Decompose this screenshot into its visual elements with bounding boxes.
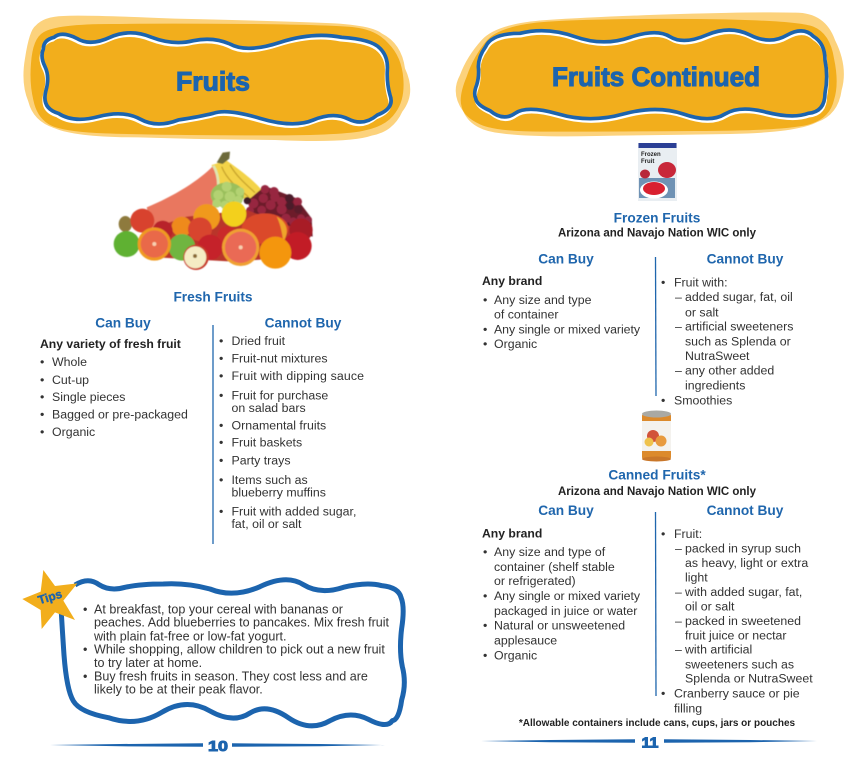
icon: frozen fruit bag: Frozen xyxy=(641,152,661,158)
list: cannot buy canned: – xyxy=(675,585,682,599)
icon: frozen fruit bag xyxy=(638,143,677,201)
list: can buy fresh: • xyxy=(40,355,44,369)
list: cannot buy fresh: • xyxy=(219,334,223,348)
subheading: canned eligibility: Arizona and Navajo Nation WIC only xyxy=(558,486,757,498)
icon: frozen fruit bag: Fruit xyxy=(641,159,654,165)
list: cannot buy frozen: – xyxy=(675,320,682,334)
list: can buy fresh: • xyxy=(40,408,44,422)
list: cannot buy canned: sweeteners such as xyxy=(685,657,794,671)
list: can buy fresh: Any variety of fresh fruit xyxy=(40,337,181,351)
list: can buy canned: Natural or unsweetened xyxy=(494,619,625,633)
list: cannot buy canned: oil or salt xyxy=(685,599,735,613)
page number: 11: 11 xyxy=(642,734,658,752)
list: cannot buy fresh: • xyxy=(219,369,223,383)
list: can buy frozen: • xyxy=(483,337,487,351)
list: can buy frozen: of container xyxy=(494,307,559,321)
list: cannot buy canned: – xyxy=(675,643,682,657)
list: cannot buy frozen: Fruit with: xyxy=(674,275,728,289)
list: can buy fresh: Whole xyxy=(52,355,87,369)
list: can buy canned: packaged in juice or water xyxy=(494,604,637,618)
list: cannot buy fresh: • xyxy=(219,418,223,432)
list: can buy canned: applesauce xyxy=(494,634,557,648)
list: cannot buy canned: packed in sweetened xyxy=(685,614,801,628)
list: cannot buy frozen: artificial sweeteners xyxy=(685,320,793,334)
heading: Frozen Fruits: Frozen Fruits xyxy=(614,211,701,226)
list: can buy canned: or refrigerated) xyxy=(494,574,576,588)
list: cannot buy fresh: Party trays xyxy=(232,453,290,467)
list: can buy frozen: Any size and type xyxy=(494,293,592,307)
list: cannot buy fresh: Dried fruit xyxy=(232,334,286,348)
list: cannot buy canned: with artificial xyxy=(684,643,752,657)
list: can buy canned: container (shelf stable xyxy=(494,560,615,574)
list: cannot buy fresh: • xyxy=(219,352,223,366)
list: cannot buy canned: • xyxy=(661,527,665,541)
list: can buy canned xyxy=(482,526,641,662)
list: cannot buy fresh: Fruit with dipping sauce xyxy=(232,369,364,383)
list: can buy canned: • xyxy=(483,589,487,603)
text: tips list xyxy=(83,602,390,697)
panel: page 11 xyxy=(456,12,844,752)
list: cannot buy canned: as heavy, light or extra xyxy=(685,556,808,570)
list: can buy fresh: Cut-up xyxy=(52,373,89,387)
panel: tips xyxy=(22,570,404,726)
list: can buy fresh: Organic xyxy=(52,425,95,439)
text: tips list: with plain fat-free or low-fat yogurt. xyxy=(93,629,286,643)
heading: Fresh Fruits: Fresh Fruits xyxy=(173,290,253,304)
list: cannot buy frozen: added sugar, fat, oil xyxy=(685,290,793,304)
list: can buy fresh: Single pieces xyxy=(52,390,125,404)
list: cannot buy canned: Splenda or NutraSweet xyxy=(685,672,813,686)
page number: 10: 10 xyxy=(208,738,228,755)
list: cannot buy fresh: Fruit-nut mixtures xyxy=(232,352,328,366)
list: cannot buy fresh: Fruit baskets xyxy=(232,436,302,450)
list: cannot buy fresh: • xyxy=(219,436,223,450)
list: can buy canned: • xyxy=(483,545,487,559)
list: can buy frozen xyxy=(482,274,641,351)
list: cannot buy fresh: Fruit with added sugar, xyxy=(232,505,356,519)
list: cannot buy canned xyxy=(661,527,813,715)
list: can buy fresh: Bagged or pre-packaged xyxy=(52,408,188,422)
list: cannot buy frozen: • xyxy=(661,393,665,407)
list: cannot buy fresh: • xyxy=(219,453,223,467)
list: cannot buy frozen: ingredients xyxy=(685,379,745,393)
heading: Cannot Buy: Cannot Buy xyxy=(265,316,342,331)
list: cannot buy fresh xyxy=(219,334,364,531)
text: tips list: At breakfast, top your cereal with bananas or xyxy=(94,602,343,616)
list: can buy fresh: • xyxy=(40,373,44,387)
page number: 11 xyxy=(481,734,817,752)
subheading: frozen eligibility: Arizona and Navajo Nation WIC only xyxy=(558,228,757,240)
list: cannot buy canned: light xyxy=(685,570,708,584)
banner: Fruits xyxy=(23,16,410,141)
panel: page 10 xyxy=(22,16,410,755)
list: cannot buy frozen: or salt xyxy=(685,305,719,319)
list: cannot buy frozen: any other added xyxy=(685,364,774,378)
image: pile of fresh fruit xyxy=(114,152,313,270)
list: cannot buy fresh: • xyxy=(219,505,223,519)
footnote: *Allowable containers include cans, cups, jars or pouches xyxy=(519,718,796,729)
list: can buy frozen: Any single or mixed variety xyxy=(494,323,641,337)
list: cannot buy canned: Cranberry sauce or pie xyxy=(674,687,800,701)
list: cannot buy canned: filling xyxy=(674,701,702,715)
text: tips list: Buy fresh fruits in season. They cost less and are xyxy=(94,669,368,683)
text: tips list: While shopping, allow children to pick out a new fruit xyxy=(94,643,385,657)
list: cannot buy fresh: • xyxy=(219,389,223,403)
heading: Can Buy: Can Buy xyxy=(538,251,594,266)
text: tips list: to try later at home. xyxy=(94,656,202,670)
list: cannot buy fresh: • xyxy=(219,473,223,487)
list: cannot buy frozen: – xyxy=(675,290,682,304)
list: cannot buy frozen: Smoothies xyxy=(674,393,732,407)
list: cannot buy fresh: Ornamental fruits xyxy=(232,418,326,432)
icon: fruit can xyxy=(642,410,671,462)
icon: tips star xyxy=(22,570,77,629)
list: cannot buy frozen: NutraSweet xyxy=(685,349,750,363)
list: cannot buy fresh: Fruit for purchase xyxy=(232,389,328,403)
list: can buy frozen: • xyxy=(483,323,487,337)
list: cannot buy frozen: – xyxy=(675,364,682,378)
list: cannot buy canned: fruit juice or nectar xyxy=(685,628,787,642)
text: tips list: • xyxy=(83,669,87,683)
list: can buy frozen: Any brand xyxy=(482,274,542,288)
list: can buy canned: Any brand xyxy=(482,526,542,540)
heading: Cannot Buy: Cannot Buy xyxy=(707,251,784,266)
list: cannot buy canned: – xyxy=(675,542,682,556)
text: tips list: • xyxy=(83,602,87,616)
text: tips list: • xyxy=(83,643,87,657)
list: cannot buy canned: with added sugar, fat, xyxy=(684,585,802,599)
list: can buy frozen: Organic xyxy=(494,337,537,351)
list: can buy fresh: • xyxy=(40,390,44,404)
list: can buy canned: • xyxy=(483,619,487,633)
title: Fruits: Fruits xyxy=(176,66,250,96)
list: can buy canned: Any size and type of xyxy=(494,545,606,559)
list: can buy frozen: • xyxy=(483,293,487,307)
title: Fruits Continued: Fruits Continued xyxy=(552,62,760,92)
list: cannot buy canned: Fruit: xyxy=(674,527,702,541)
list: cannot buy fresh: fat, oil or salt xyxy=(232,517,302,531)
heading: Cannot Buy: Cannot Buy xyxy=(707,503,784,518)
list: can buy canned: Organic xyxy=(494,648,537,662)
list: cannot buy frozen xyxy=(661,275,793,407)
list: cannot buy fresh: blueberry muffins xyxy=(232,485,326,499)
list: can buy fresh: • xyxy=(40,425,44,439)
page number: 10 xyxy=(50,738,385,755)
icon: tips star: Tips xyxy=(36,587,64,607)
list: cannot buy canned: packed in syrup such xyxy=(685,542,801,556)
list: cannot buy fresh: Items such as xyxy=(232,473,308,487)
list: cannot buy frozen: such as Splenda or xyxy=(685,335,791,349)
list: can buy canned: Any single or mixed variety xyxy=(494,589,641,603)
text: tips list: likely to be at their peak flavor. xyxy=(94,683,263,697)
heading: Can Buy: Can Buy xyxy=(538,503,594,518)
list: can buy canned: • xyxy=(483,648,487,662)
heading: Can Buy: Can Buy xyxy=(95,316,151,331)
heading: Canned Fruits: Canned Fruits* xyxy=(608,467,706,482)
list: can buy fresh xyxy=(40,337,188,439)
list: cannot buy frozen: • xyxy=(661,275,665,289)
banner: Fruits Continued xyxy=(456,12,844,136)
text: tips list: peaches. Add blueberries to pancakes. Mix fresh fruit xyxy=(94,616,390,630)
list: cannot buy fresh: on salad bars xyxy=(232,401,306,415)
list: cannot buy canned: • xyxy=(661,687,665,701)
list: cannot buy canned: – xyxy=(675,614,682,628)
